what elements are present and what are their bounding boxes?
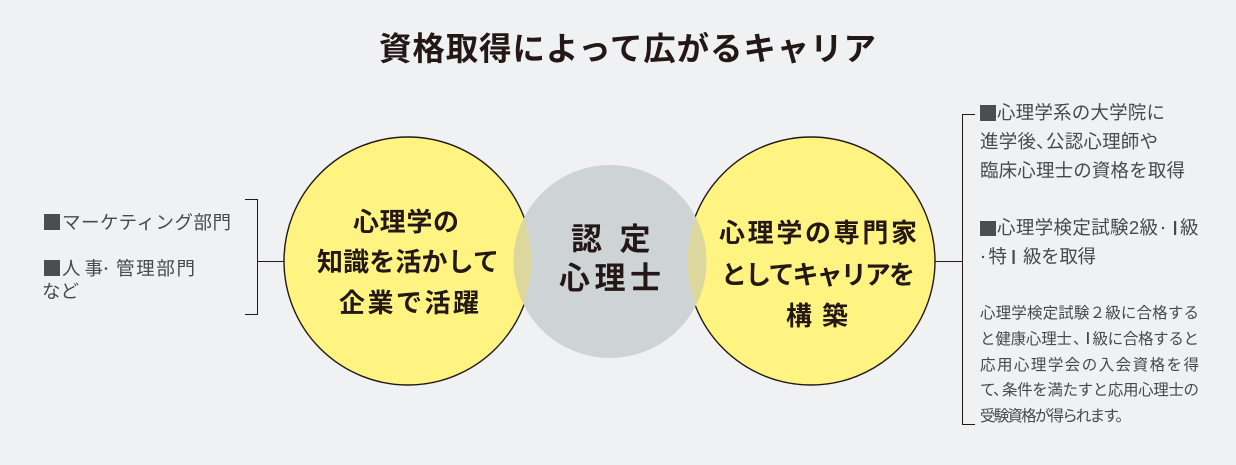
right list: qualifications: 進学後: [980, 131, 1036, 152]
right note text: 、: [993, 382, 1009, 399]
right circle text: 心理学の専門家: [719, 218, 917, 248]
right list: qualifications: 級を取得: [1023, 246, 1096, 267]
left circle text: 企業で活躍: [339, 288, 479, 318]
right note text: [980, 304, 1199, 425]
overlap tint: left: [514, 218, 532, 304]
right note text: 、: [1073, 331, 1089, 348]
right note text: て: [980, 382, 996, 399]
left list: departments: 人事: [62, 258, 103, 279]
center circle text: [559, 222, 661, 296]
right list: qualifications: 心理学検定試験2級: [997, 217, 1158, 238]
right circle text: 構築: [786, 301, 848, 331]
center circle text: 定: [620, 222, 650, 257]
left list: departments: 管理部門: [116, 258, 195, 279]
left list: departments: [42, 212, 231, 302]
circle: left yellow: [284, 137, 532, 385]
right list: qualifications: 級: [1180, 217, 1199, 238]
circle: right yellow: [687, 137, 935, 385]
right list: qualifications: [980, 102, 1199, 267]
left circle text: 心理学の: [353, 207, 459, 237]
right note text: 心理学検定試験２級に合格する: [980, 304, 1199, 322]
left circle text: [317, 207, 499, 318]
connector: left bracket: [245, 200, 284, 314]
right note text: 級に合格すると: [1092, 330, 1199, 348]
right note text: と健康心理士: [980, 330, 1072, 348]
right circle text: としてキャリアを: [721, 260, 915, 290]
left circle text: 知識を活かして: [317, 247, 499, 277]
right list: qualifications: 特: [988, 246, 1007, 267]
right note text: 受験資格が得られます。: [980, 407, 1131, 425]
right note text: 応用心理学会の入会資格を得: [980, 356, 1199, 374]
center circle text: 認: [571, 222, 602, 257]
right note text: 条件を満たすと応用心理士の: [1002, 381, 1199, 399]
center circle text: 心理士: [559, 261, 661, 296]
left list: departments: など: [42, 281, 79, 302]
right list: qualifications: 心理学系の大学院に: [997, 102, 1165, 123]
overlap tint: right: [688, 217, 706, 306]
circle: center gray: [514, 165, 706, 358]
left list: departments: マーケティング部門: [62, 212, 231, 233]
right list: qualifications: 公認心理師や: [1046, 131, 1158, 152]
right circle text: [719, 218, 917, 331]
right list: qualifications: 臨床心理士の資格を取得: [980, 160, 1185, 181]
right list: qualifications: 、: [1036, 131, 1055, 152]
connector: right bracket: [935, 114, 975, 424]
title: 資格取得によって広がるキャリア: [379, 30, 876, 67]
